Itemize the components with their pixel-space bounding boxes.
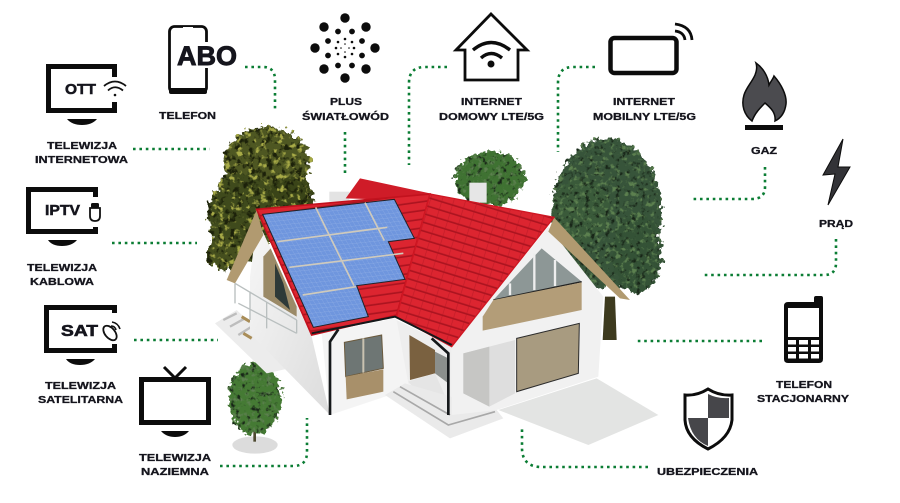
- label: telewizja satelitarna: SATELITARNA: [38, 394, 123, 406]
- front window: [344, 335, 383, 399]
- wall: front lower: [322, 318, 410, 415]
- label: plus światłowód: PLUS: [330, 96, 362, 108]
- label: plus światłowód: ŚWIATŁOWÓD: [302, 110, 389, 123]
- label: telewizja internetowa: INTERNETOWA: [35, 154, 128, 166]
- label: telewizja naziemna: [139, 452, 212, 478]
- label: telewizja internetowa: TELEWIZJA: [47, 140, 117, 152]
- icon: home internet: [456, 14, 527, 80]
- label: internet domowy: DOMOWY LTE/5G: [439, 111, 544, 123]
- icon: fiber optic dots: [310, 13, 380, 83]
- label: internet mobilny: INTERNET: [613, 96, 676, 108]
- icon: mobile tablet: [610, 24, 692, 73]
- tree: large dark right: [552, 138, 662, 340]
- front steps: [385, 383, 503, 438]
- connector: telefon stacjonarny: [635, 340, 762, 342]
- icon: insurance shield: [685, 389, 732, 449]
- wall: garage and gable: [452, 227, 603, 415]
- tree: back centre: [455, 151, 525, 206]
- garage door: [517, 323, 579, 392]
- label: telewizja kablowa: TELEWIZJA: [27, 262, 97, 274]
- connector: telewizja internetowa: [133, 148, 210, 150]
- icon: OTT television: OTT: [65, 82, 96, 98]
- label: internet mobilny: MOBILNY LTE/5G: [593, 111, 696, 123]
- icon: lightning bolt: [823, 139, 850, 205]
- illustration: house with solar panels and trees: [207, 127, 662, 454]
- icon: ABO phone: [169, 26, 237, 94]
- icon: landline phone: [784, 296, 823, 363]
- label: telefon: TELEFON: [159, 110, 216, 122]
- label: gaz: GAZ: [751, 145, 778, 157]
- connector: ubezpieczenia: [522, 428, 648, 467]
- tree: small front: [228, 362, 282, 454]
- label: plus światłowód: [302, 96, 389, 123]
- balcony recess: [235, 248, 297, 333]
- tree: olive left: [207, 127, 313, 272]
- label: telefon stacjonarny: TELEFON: [776, 379, 832, 391]
- icon: IPTV television: IPTV: [45, 203, 80, 219]
- label: telewizja naziemna: TELEWIZJA: [139, 452, 212, 464]
- label: telewizja internetowa: [35, 140, 128, 166]
- roof: left plane: [257, 194, 430, 335]
- roof: right plane: [397, 194, 554, 347]
- gutters and downpipes: [312, 317, 452, 415]
- label: prąd: PRĄD: [819, 218, 853, 230]
- roof: back section: [346, 178, 430, 240]
- wall: left side: [250, 220, 330, 415]
- driveway: [498, 378, 658, 445]
- connector: telefon: [245, 67, 275, 110]
- left terrace and steps: [215, 310, 297, 373]
- connector: telewizja satelitarna: [134, 339, 218, 341]
- label: telewizja satelitarna: TELEWIZJA: [45, 380, 116, 392]
- label: internet domowy: INTERNET: [461, 96, 523, 108]
- label: telewizja naziemna: NAZIEMNA: [141, 466, 209, 478]
- stone column: [463, 340, 515, 407]
- icon: terrestrial television: [142, 367, 208, 437]
- porch: [397, 320, 452, 413]
- icon: ABO phone: ABO: [177, 41, 237, 71]
- label: internet domowy: [439, 96, 544, 123]
- icon: SAT television: [46, 308, 120, 365]
- house body: [215, 178, 658, 445]
- connector: telewizja kablowa: [112, 242, 197, 244]
- connector: gaz: [693, 167, 765, 199]
- label: telefon stacjonarny: [757, 379, 849, 405]
- connector: internet mobilny: [558, 67, 595, 152]
- gable window: [483, 248, 582, 331]
- connector: prąd: [702, 239, 836, 275]
- connector: internet domowy: [409, 67, 447, 165]
- connector: światłowód: [344, 132, 346, 175]
- stone recess: [463, 347, 489, 407]
- label: telefon stacjonarny: STACJONARNY: [757, 393, 849, 405]
- icon: SAT television: SAT: [61, 323, 98, 340]
- label: telewizja kablowa: [27, 262, 97, 288]
- chimneys: [329, 183, 487, 203]
- icon: OTT television: [48, 66, 126, 125]
- solar panels: [263, 199, 414, 327]
- label: ubezpieczenia: UBEZPIECZENIA: [657, 466, 758, 478]
- gable eaves: [227, 210, 630, 300]
- icon: gas flame: [743, 63, 786, 130]
- label: telewizja kablowa: KABLOWA: [30, 276, 94, 288]
- connector: telewizja naziemna: [220, 418, 307, 466]
- label: telewizja satelitarna: [38, 380, 123, 406]
- label: internet mobilny: [593, 96, 696, 123]
- icon: IPTV television: [28, 190, 100, 246]
